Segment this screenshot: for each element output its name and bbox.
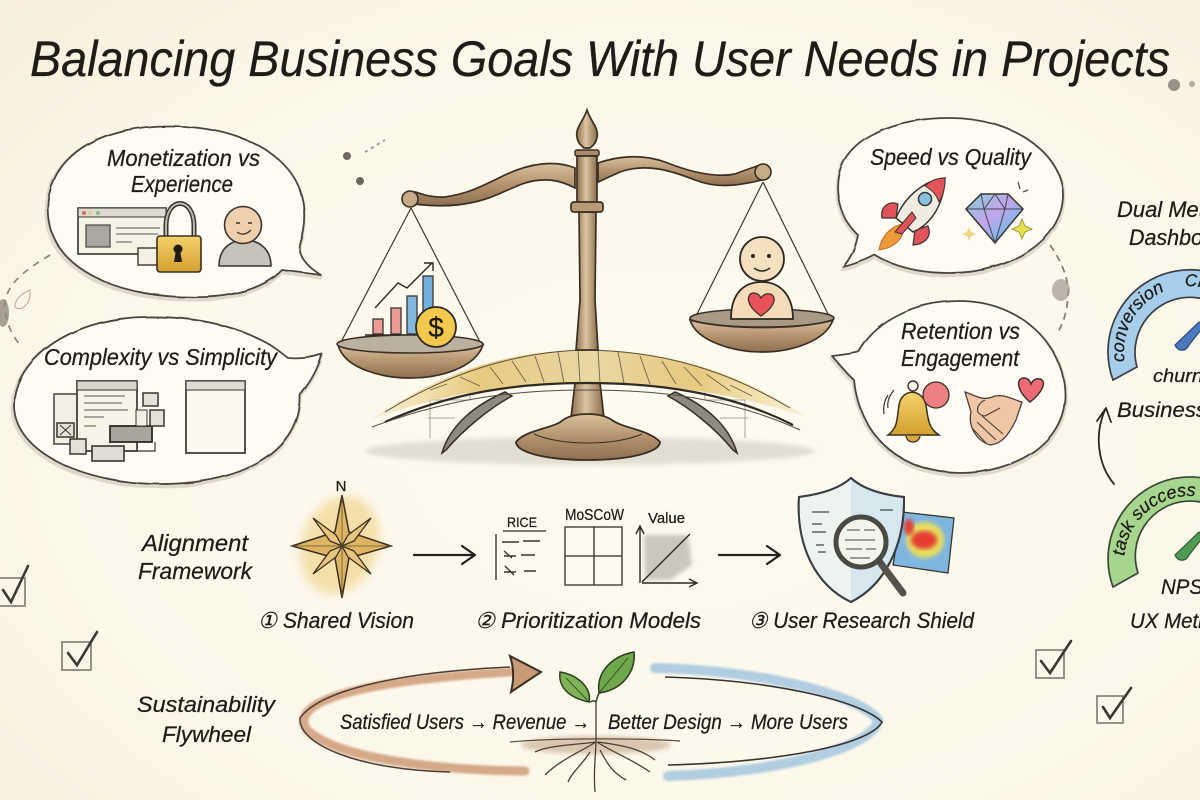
heading (137, 692, 277, 747)
icon: prioritization models (496, 507, 697, 587)
bubble outline (47, 126, 321, 299)
icon: heatmap (893, 512, 954, 573)
icon: bell (884, 381, 949, 442)
labels (1130, 576, 1200, 633)
panel: speed vs quality (838, 118, 1063, 275)
gauge labels: conversion (1114, 283, 1163, 362)
value chart (636, 510, 697, 587)
panel: complexity vs simplicity (13, 317, 322, 486)
needle (1175, 532, 1200, 560)
needle (1175, 322, 1200, 350)
MoSCoW grid: MoSCoW (565, 507, 625, 524)
ground shadow (365, 437, 815, 465)
icon: dollar coin (416, 307, 456, 347)
bridge deck (370, 350, 807, 430)
flywheel text: Satisfied Users → Revenue → (340, 711, 590, 734)
checkbox: left top (0, 566, 28, 606)
connector: right dashed (1050, 245, 1070, 332)
pan back rim (690, 309, 834, 327)
column shaft (576, 212, 598, 350)
icon: rocket (879, 178, 945, 250)
pan bowl (690, 320, 833, 352)
business gauge (1107, 268, 1200, 422)
icon: simple window (186, 381, 245, 453)
gauge arc (1108, 270, 1200, 380)
icon: growth chart (365, 263, 433, 335)
bubble outline (832, 301, 1065, 475)
panel: retention vs engagement (832, 301, 1065, 475)
heading (1117, 197, 1200, 250)
RICE table: RICE (507, 514, 537, 530)
heading: Experience (131, 171, 233, 197)
heading: Framework (138, 558, 253, 584)
panel: monetization vs experience (47, 126, 321, 299)
icon: person (219, 206, 271, 266)
step labels: ① Shared Vision (258, 608, 414, 633)
heading: Speed vs Quality (870, 144, 1032, 170)
icon: handshake (965, 392, 1022, 445)
heading: Engagement (901, 345, 1020, 371)
heading: Alignment (140, 530, 250, 556)
icon: compass star: N (336, 478, 346, 495)
arrow (719, 546, 780, 564)
step labels: ③ User Research Shield (749, 608, 975, 633)
heading: Complexity vs Simplicity (44, 344, 278, 370)
speckles (343, 79, 1195, 185)
heading: Flywheel (162, 722, 252, 747)
heading: Monetization vs (107, 145, 260, 171)
arrow: brown loop (300, 656, 541, 772)
icon: sprout with roots (510, 652, 680, 792)
checkbox: right bottom (1097, 688, 1131, 723)
left pan: business (337, 208, 483, 378)
labels: churn (1153, 366, 1200, 386)
RICE table (496, 514, 546, 580)
step labels: ② Prioritization Models (475, 608, 701, 633)
step labels (258, 608, 975, 633)
flywheel text: Better Design → More Users (608, 711, 848, 734)
icon: padlock (157, 204, 201, 272)
value chart: Value (648, 510, 685, 527)
icon: shield with magnifier (799, 478, 904, 602)
ux gauge (1107, 476, 1200, 633)
labels (1117, 366, 1200, 422)
heading: Sustainability (137, 692, 277, 717)
column base (516, 383, 660, 460)
column head and finial (571, 110, 603, 212)
icon: compass star (287, 478, 393, 605)
arrow (414, 546, 475, 564)
gauge label: task success (1113, 486, 1196, 556)
icon: cluttered windows (54, 381, 164, 461)
gauge arc (1108, 477, 1200, 587)
arrow: metrics link (1097, 408, 1114, 484)
icon: smiling person with heart (731, 237, 793, 319)
icon: browser with ad (78, 208, 166, 265)
pan bowl (337, 335, 483, 378)
central scale and bridge (337, 110, 834, 465)
beam (402, 157, 771, 207)
heading (901, 318, 1020, 371)
connector: left dashed (0, 255, 50, 345)
right pan: user (690, 182, 834, 352)
bridge stonework (428, 385, 748, 453)
icon: diamond (962, 182, 1032, 243)
heading (107, 145, 260, 197)
icon: heart (1019, 378, 1043, 402)
panel: dual metrics dashboard (1096, 197, 1200, 633)
panel: alignment framework (138, 478, 975, 633)
icon: dollar coin: $ (428, 312, 444, 343)
checkbox: left bottom (62, 632, 97, 670)
checkbox: right top (1036, 641, 1071, 678)
labels: Business (1117, 399, 1200, 422)
heading: Retention vs (901, 318, 1020, 344)
heading (138, 530, 253, 584)
MoSCoW grid (565, 507, 625, 585)
flywheel text (340, 711, 848, 734)
arrow: blue loop (655, 668, 882, 776)
bubble outline (838, 118, 1063, 275)
panel: sustainability flywheel (137, 652, 882, 792)
bubble outline (13, 317, 322, 486)
